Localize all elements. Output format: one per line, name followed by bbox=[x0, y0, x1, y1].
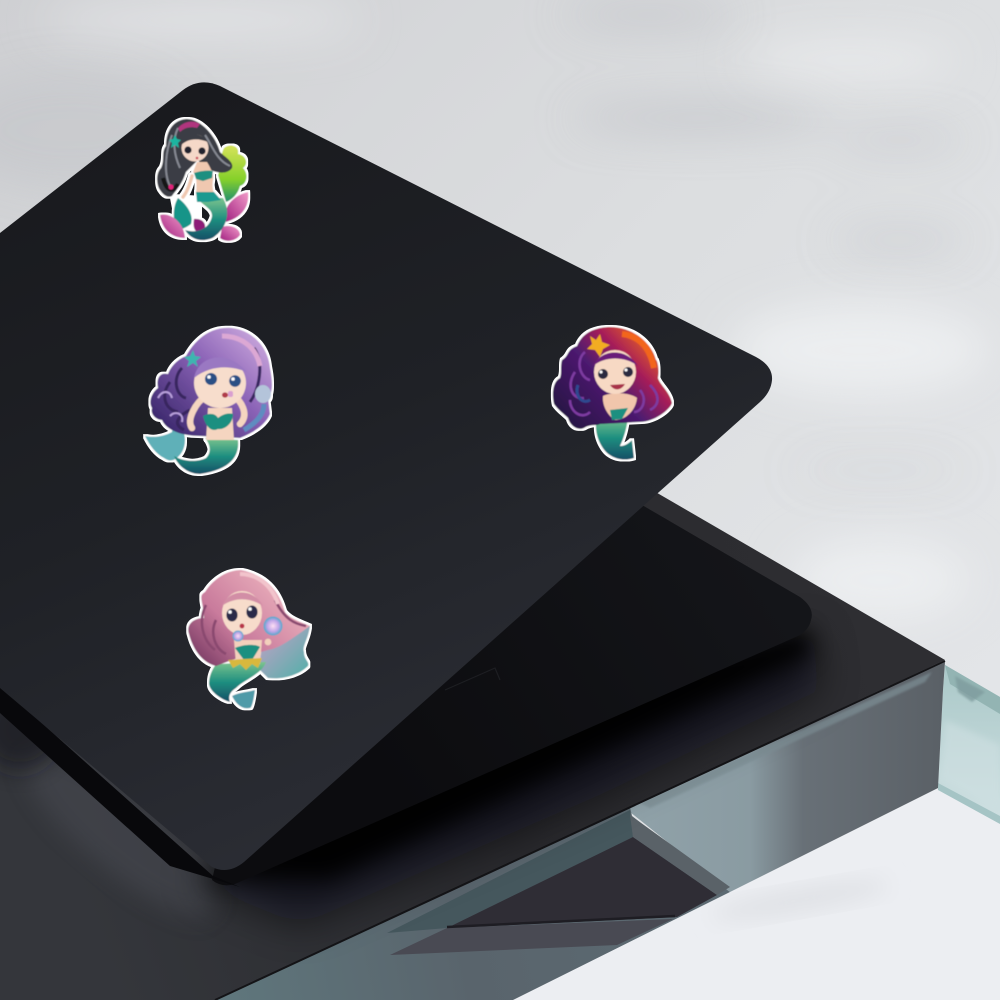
glass table front face bbox=[215, 662, 945, 1000]
sticker: grey-haired mermaid with green and pink fins bbox=[157, 119, 248, 241]
bikini and gold skirt bbox=[235, 645, 260, 660]
scaled tail bbox=[185, 198, 227, 240]
bubbles bbox=[264, 616, 282, 636]
white table surface in the foreground bbox=[513, 788, 1000, 1000]
torso bbox=[603, 393, 637, 420]
black table top bbox=[0, 483, 945, 1000]
white backing bbox=[172, 196, 200, 228]
face bbox=[194, 358, 246, 408]
teal left fin bbox=[174, 198, 192, 230]
bikini bbox=[203, 413, 233, 430]
sticker: purple and red haired mermaid bbox=[553, 327, 672, 460]
green fin bbox=[218, 146, 247, 202]
teal drape fin bbox=[258, 626, 310, 678]
lower reflection band bbox=[390, 919, 673, 955]
heart bbox=[168, 184, 174, 190]
gold starfish bbox=[587, 334, 610, 357]
laptop lid bbox=[0, 82, 772, 870]
fiery hair bbox=[553, 327, 672, 429]
tiara and star bbox=[178, 122, 200, 132]
shell lock of hair bbox=[255, 385, 271, 403]
reflection edge bbox=[630, 815, 730, 895]
torso and arm bbox=[193, 162, 214, 194]
skirt fin bbox=[196, 192, 221, 202]
shadow under laptop bbox=[190, 628, 820, 925]
tail fin bbox=[145, 428, 185, 460]
grey right part of the glass bbox=[630, 662, 945, 892]
purple hair bbox=[150, 328, 272, 438]
pink petals bbox=[225, 192, 248, 222]
body bbox=[234, 640, 262, 664]
dark reflection block bbox=[447, 837, 717, 928]
dark gap under lid edge bbox=[0, 686, 240, 887]
soft highlight on table bbox=[6, 731, 234, 939]
scaled tail with fin bbox=[209, 662, 266, 702]
face bbox=[594, 350, 636, 394]
sticker: pink-haired mermaid holding bubble bbox=[188, 570, 310, 708]
laptop base bbox=[212, 500, 812, 885]
face bbox=[182, 134, 208, 162]
body and arms bbox=[206, 408, 234, 440]
face bbox=[222, 591, 262, 635]
teal band above dark reflection bbox=[387, 810, 633, 933]
bikini bbox=[194, 171, 213, 181]
starfish bbox=[184, 350, 201, 367]
glass highlight band bbox=[640, 672, 932, 808]
sticker: purple-haired mermaid bbox=[145, 328, 272, 474]
pink hair bbox=[188, 570, 310, 666]
tail bbox=[596, 416, 634, 460]
scaled tail bbox=[174, 438, 238, 474]
dark hair bbox=[157, 119, 232, 197]
glass table right side edge bbox=[938, 665, 1000, 824]
